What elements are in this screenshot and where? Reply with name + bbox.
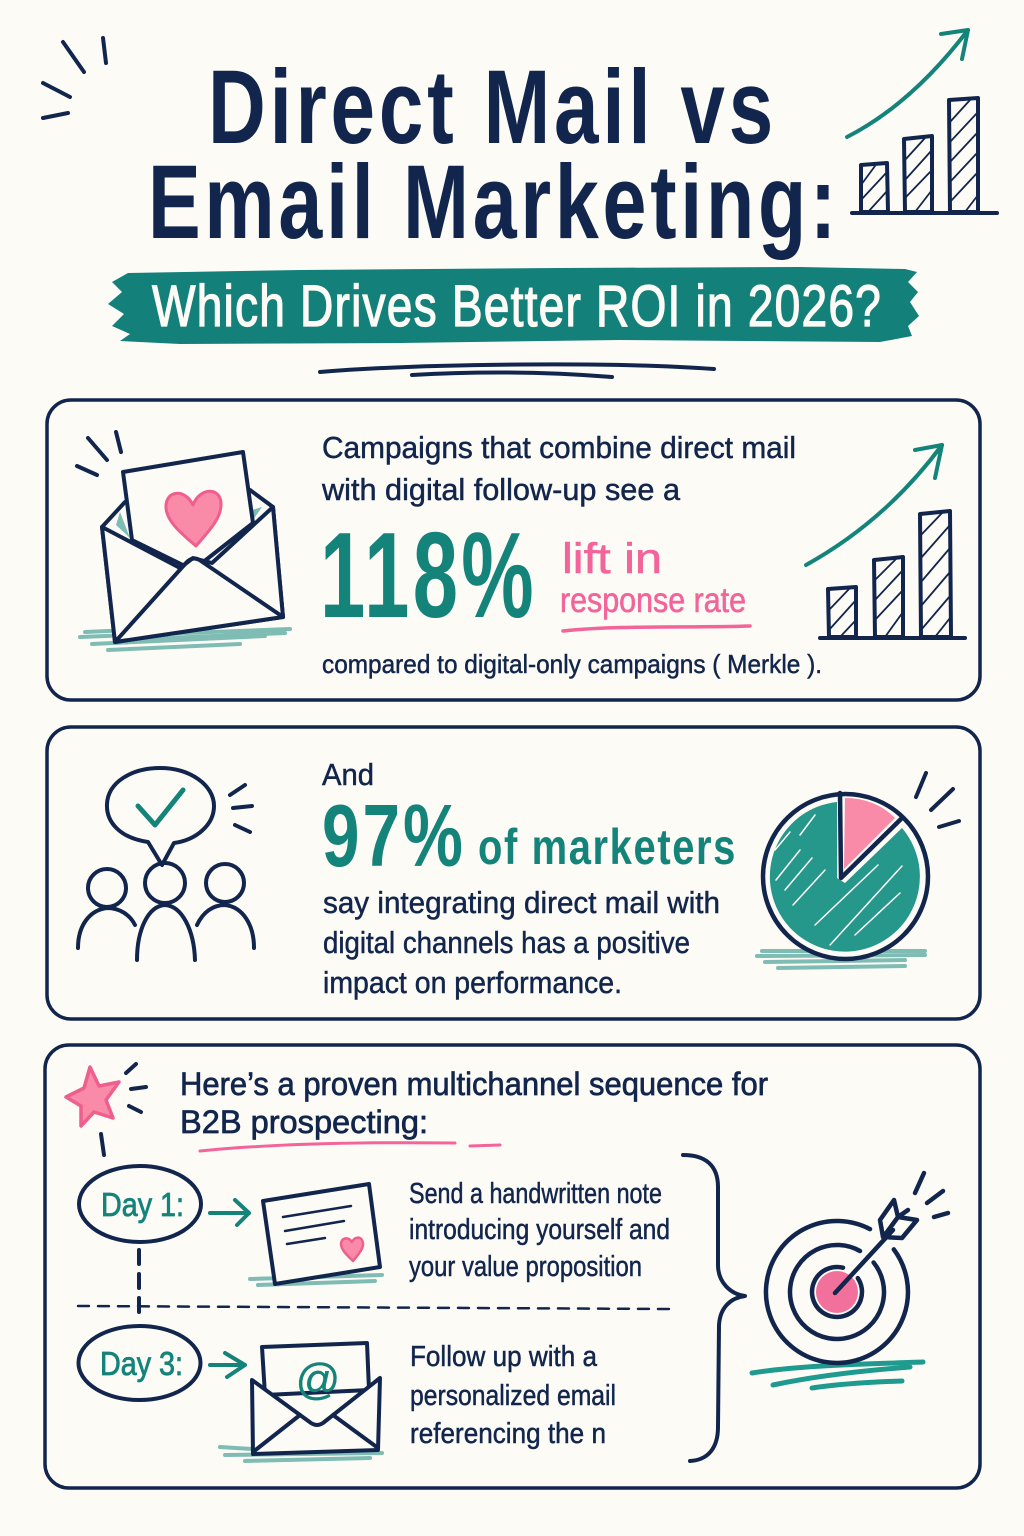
title underline [320, 364, 714, 377]
step: Day 3 [78, 1326, 616, 1461]
text: positive impact [323, 885, 720, 1000]
badge: Day 3: Day 3: [100, 1345, 183, 1382]
arrow: Day 3 [210, 1353, 245, 1377]
icon: pink star [66, 1064, 146, 1155]
text: positive impact: say integrating direct mail with [323, 885, 720, 920]
badge: Day 1: Day 1: [101, 1186, 184, 1223]
stat label: lift in response rate: response rate [560, 581, 746, 620]
text: comparison source: compared to digital-only campaigns ( Merkle ). [322, 649, 822, 679]
panel: 118% lift [47, 400, 980, 700]
chart: rising bars [806, 445, 965, 638]
heading: sequence [180, 1066, 768, 1151]
icon: target with arrow [752, 1173, 948, 1388]
text: And: And [322, 757, 374, 792]
text: Day 1 action: Send a handwritten note [409, 1178, 662, 1210]
step: Day 1 [79, 1166, 670, 1285]
icon: email envelope: @ [296, 1355, 340, 1404]
title [148, 49, 840, 261]
text: Day 3 action: referencing the n [410, 1418, 606, 1450]
text: campaigns intro [321, 430, 796, 507]
stat: 97% of marketers: 97% [322, 786, 466, 885]
icon: people with speech bubble [78, 768, 254, 960]
heading: sequence: B2B prospecting: [180, 1104, 428, 1140]
title: Direct Mail vs [208, 49, 777, 166]
icon: sparkle lines top left [43, 38, 106, 118]
stat: 97% of marketers [322, 786, 737, 885]
stat: 118%: 118% [320, 507, 537, 643]
icon: open envelope with heart [77, 432, 290, 650]
icon: rising bar chart top right [847, 30, 997, 213]
icon: email envelope [220, 1343, 382, 1461]
connector: dashed timeline [78, 1250, 670, 1316]
text: Day 3 action: personalized email [410, 1380, 616, 1412]
text: Day 3 action [410, 1341, 616, 1450]
arrow: Day 1 [210, 1200, 249, 1225]
text: Day 3 action: Follow up with a [410, 1341, 598, 1373]
badge: Day 3 [78, 1326, 200, 1400]
text: Day 1 action: your value proposition [409, 1251, 642, 1283]
stat label: lift in response rate: lift in [562, 535, 662, 583]
badge: Day 1 [79, 1166, 201, 1242]
text: Day 1 action: introducing yourself and [409, 1214, 670, 1246]
brace [683, 1155, 745, 1461]
text: Day 1 action [409, 1178, 670, 1283]
text: campaigns intro: Campaigns that combine direct mail [322, 430, 796, 465]
text: positive impact: impact on performance. [323, 965, 622, 1000]
panel: multichannel sequence [45, 1045, 980, 1488]
text: positive impact: digital channels has a positive [323, 925, 690, 960]
stat label: lift in response rate [560, 535, 750, 631]
heading: sequence: Here’s a proven multichannel sequence for [180, 1066, 768, 1102]
stat: 97% of marketers: of marketers [478, 819, 737, 875]
panel: 97% of marketers [47, 727, 980, 1019]
chart: pie 97% [757, 773, 959, 968]
icon: handwritten note [250, 1184, 382, 1285]
text: campaigns intro: with digital follow-up see a [321, 472, 681, 507]
